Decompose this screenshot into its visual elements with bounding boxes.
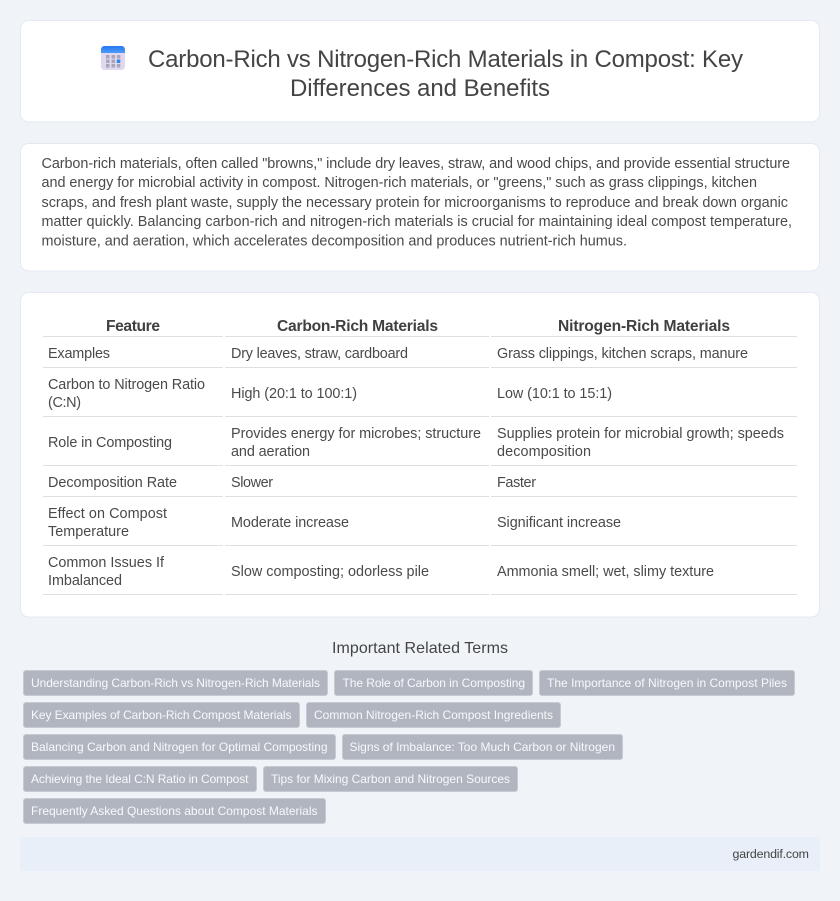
related term tags — [24, 670, 794, 824]
row: examples: Examples — [48, 346, 110, 362]
tag — [264, 766, 518, 792]
row: common issues if imbalanced: Ammonia smell; wet, slimy texture — [497, 564, 714, 580]
tag — [334, 670, 532, 696]
row: carbon to nitrogen ratio: Low (10:1 to 15:1) — [497, 386, 612, 402]
row: effect on compost temperature: Effect on Compost — [48, 506, 167, 522]
row: effect on compost temperature: Moderate increase — [231, 515, 349, 531]
tag: Common Nitrogen-Rich Compost Ingredients — [314, 708, 553, 722]
row: examples — [48, 346, 748, 362]
tag — [24, 798, 326, 824]
heading: important related terms: Important Related Terms — [332, 640, 508, 657]
tag: Tips for Mixing Carbon and Nitrogen Sources — [271, 772, 510, 786]
row: decomposition rate: Decomposition Rate — [48, 475, 177, 491]
row: carbon to nitrogen ratio: (C:N) — [48, 395, 81, 411]
tag — [24, 734, 336, 760]
tag: Balancing Carbon and Nitrogen for Optimal Composting — [31, 740, 328, 754]
tag: Achieving the Ideal C:N Ratio in Compost — [31, 772, 249, 786]
text block: introduction: Carbon-rich materials, often called "browns," include dry leaves, straw, and wood chips, and provide essential structure — [42, 156, 790, 172]
footer — [20, 837, 820, 871]
row: role in composting: Supplies protein for microbial growth; speeds — [497, 426, 784, 442]
tag — [540, 670, 794, 696]
table header: Carbon-Rich Materials — [277, 318, 438, 335]
row: common issues if imbalanced: Common Issues If — [48, 555, 165, 571]
tag — [306, 702, 560, 728]
tag: Signs of Imbalance: Too Much Carbon or Nitrogen — [350, 740, 615, 754]
title: Carbon-Rich vs Nitrogen-Rich Materials in Compost: Key — [148, 46, 743, 73]
row: role in composting: decomposition — [497, 444, 591, 460]
tag — [24, 702, 300, 728]
icon: calendar — [101, 46, 125, 70]
row: role in composting — [48, 426, 784, 460]
row: common issues if imbalanced — [48, 555, 714, 589]
row: role in composting: Role in Composting — [48, 435, 172, 451]
row: role in composting: Provides energy for microbes; structure — [231, 426, 481, 442]
tag: Frequently Asked Questions about Compost Materials — [31, 804, 318, 818]
row: carbon to nitrogen ratio — [48, 377, 612, 411]
panel: header — [20, 20, 820, 122]
footer: gardendif.com — [732, 847, 809, 861]
table header: Feature — [106, 318, 160, 335]
row: carbon to nitrogen ratio: High (20:1 to 100:1) — [231, 386, 357, 402]
row: effect on compost temperature: Significant increase — [497, 515, 621, 531]
tag: The Importance of Nitrogen in Compost Piles — [547, 676, 787, 690]
text block: introduction: matter quickly. Balancing carbon-rich and nitrogen-rich materials is crucial for maintaining ideal compost temperature, — [42, 214, 792, 230]
tag: Understanding Carbon-Rich vs Nitrogen-Rich Materials — [31, 676, 320, 690]
row: effect on compost temperature: Temperature — [48, 524, 129, 540]
row: decomposition rate: Slower — [231, 475, 273, 491]
tag — [24, 766, 256, 792]
text block: introduction: scraps, and fresh plant waste, supply the necessary protein for microorganisms to reproduce and break down organic — [42, 195, 788, 211]
row: carbon to nitrogen ratio: Carbon to Nitrogen Ratio — [48, 377, 205, 393]
tag: Key Examples of Carbon-Rich Compost Materials — [31, 708, 292, 722]
row: common issues if imbalanced: Slow composting; odorless pile — [231, 564, 429, 580]
row: decomposition rate: Faster — [497, 475, 536, 491]
text block: introduction — [42, 156, 792, 250]
panel: introduction text — [20, 144, 820, 271]
title — [148, 46, 743, 102]
tag: The Role of Carbon in Composting — [342, 676, 525, 690]
row: common issues if imbalanced: Imbalanced — [48, 573, 122, 589]
table header: Nitrogen-Rich Materials — [558, 318, 730, 335]
panel: comparison table — [20, 292, 820, 617]
row: decomposition rate — [48, 475, 536, 491]
tag — [24, 670, 328, 696]
tag — [342, 734, 622, 760]
text block: introduction: moisture, and aeration, which accelerates decomposition and produces nutrient-rich humus. — [42, 234, 627, 250]
row: examples: Dry leaves, straw, cardboard — [231, 346, 408, 362]
text block: introduction: and energy for microbial activity in compost. Nitrogen-rich materials, or "greens," such as grass clippings, kitchen — [42, 175, 757, 191]
row: examples: Grass clippings, kitchen scraps, manure — [497, 346, 748, 362]
table header — [106, 318, 730, 335]
row: role in composting: and aeration — [231, 444, 310, 460]
row: effect on compost temperature — [48, 506, 621, 540]
title: Differences and Benefits — [290, 75, 550, 102]
